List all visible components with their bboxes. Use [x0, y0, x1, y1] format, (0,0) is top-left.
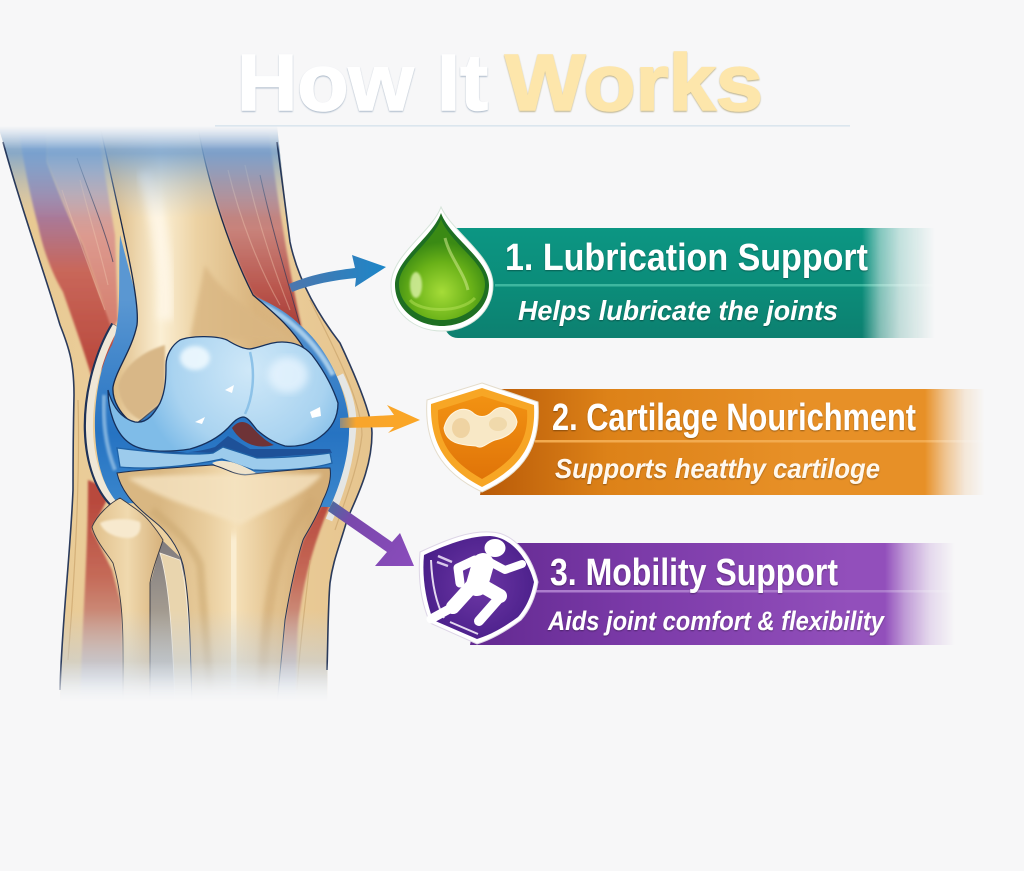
upper left pale muscle — [48, 148, 118, 326]
heading: 3. Mobility Support — [550, 552, 838, 594]
lower left muscle — [82, 479, 122, 673]
icon: water drop — [391, 207, 493, 331]
shield inner stripe — [431, 560, 478, 634]
orange banner — [480, 389, 985, 495]
icon: runner shield — [419, 532, 538, 644]
meniscus — [117, 447, 332, 470]
cartilage piece — [444, 407, 517, 447]
tibia — [117, 465, 330, 705]
outer capsule band right — [329, 375, 353, 520]
teal banner — [445, 228, 940, 338]
lower right muscle — [281, 506, 330, 672]
knee anatomy illustration — [0, 126, 378, 706]
femur texture — [118, 345, 165, 420]
subtext: Helps lubricate the joints — [518, 295, 838, 326]
joint gap — [232, 422, 274, 446]
upper left muscle — [22, 144, 116, 376]
capsule pale rim — [262, 305, 333, 375]
fibula head highlight — [100, 519, 140, 538]
top blue tint — [0, 128, 284, 214]
outer capsule band left — [88, 325, 115, 503]
arrow: blue to lubrication — [289, 255, 386, 292]
synovial capsule — [95, 235, 349, 507]
secondary tibial strip — [160, 552, 190, 679]
icon: cartilage shield — [427, 383, 538, 492]
leg outline — [3, 142, 372, 690]
heading: 2. Cartilage Nourichment — [552, 397, 916, 439]
runner figure — [431, 539, 522, 621]
title: works: Works — [505, 38, 763, 127]
title underline — [215, 125, 850, 127]
title — [237, 38, 763, 127]
tendon stripes — [68, 300, 362, 690]
purple banner — [470, 543, 960, 645]
motion lines — [437, 556, 452, 566]
gap beside fibula — [150, 541, 184, 678]
panel: cartilage nourishment — [427, 383, 985, 495]
femoral cartilage cap — [108, 337, 338, 451]
upper right muscle — [203, 146, 303, 328]
infographic canvas — [0, 51, 980, 694]
fibula — [92, 498, 163, 705]
dark band under cartilage — [154, 436, 332, 458]
arrow: purple to mobility — [328, 501, 414, 566]
panel: mobility support — [419, 532, 960, 645]
muscle separators — [77, 158, 300, 325]
leg silhouette — [0, 126, 378, 706]
femur — [100, 126, 305, 425]
arrow: orange to cartilage — [340, 405, 420, 433]
bottom tint — [60, 615, 328, 700]
heading: 1. Lubrication Support — [505, 237, 868, 279]
subtext: Aids joint comfort & flexibility — [547, 606, 886, 636]
meniscus centre — [212, 461, 256, 474]
muscle fibres — [62, 165, 290, 310]
tibia texture — [128, 474, 322, 525]
panel: lubrication support — [391, 207, 940, 338]
subtext: Supports heatthy cartiloge — [555, 453, 880, 484]
cartilage highlights — [180, 346, 321, 424]
title: how it: How It — [237, 38, 488, 127]
